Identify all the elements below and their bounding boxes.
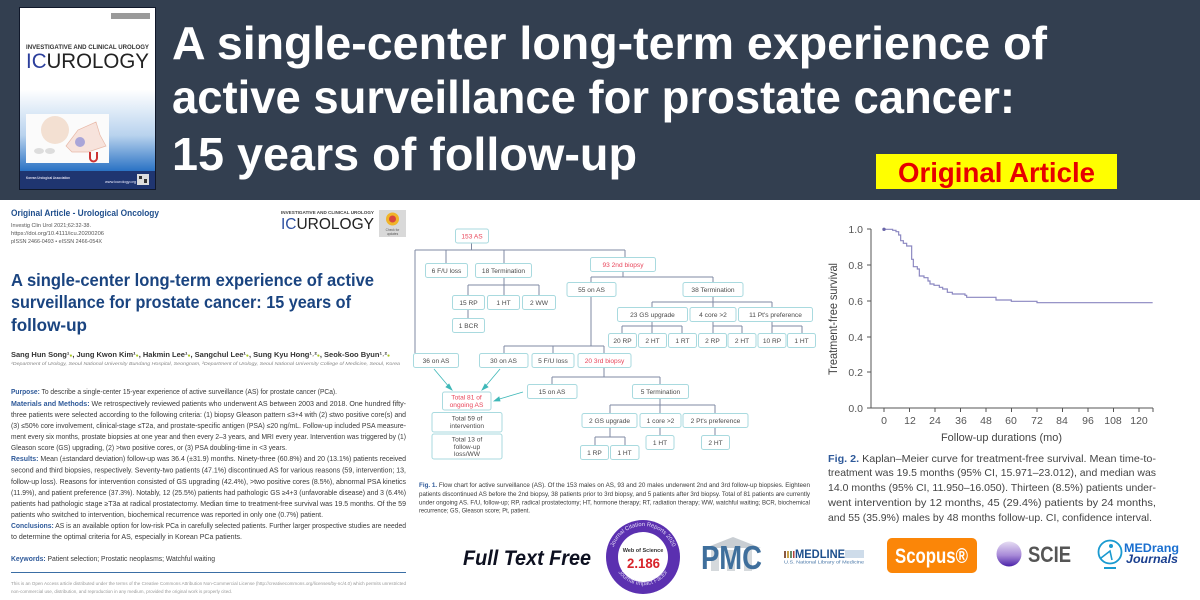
abstract: ment every six months, prostate biopsies at one year and then every 2–3 years, and MRI every year. Intervention was triggered by (1) <box>11 434 406 441</box>
journal cover: Korean Urological Association <box>26 176 70 180</box>
node: 93 2nd biopsy <box>590 258 656 272</box>
node: 2 GS upgrade <box>582 414 637 428</box>
node: 5 Termination: 5 Termination <box>641 389 681 396</box>
node: 15 RP <box>452 296 484 310</box>
license note: This is an Open Access article distributed under the terms of the Creative Commons Attribution Non-Commercial License (http://creativecommons.org/licenses/by-nc/4.0) which permits unrestricted <box>11 581 406 586</box>
article title: follow-up <box>11 315 87 335</box>
node: 2 HT: 2 HT <box>645 338 660 345</box>
node: 1 HT <box>488 296 520 310</box>
node: 1 core >2 <box>640 414 681 428</box>
node: 1 HT <box>788 334 816 348</box>
node: 36 on AS: 36 on AS <box>423 358 450 365</box>
node: 2 GS upgrade: 2 GS upgrade <box>589 418 630 425</box>
main title: 15 years of follow-up <box>172 128 637 180</box>
panel: article first page <box>11 208 407 594</box>
main title: active surveillance for prostate cancer: <box>172 71 1015 123</box>
x axis tick labels: 0 <box>881 415 887 427</box>
node: 10 RP <box>758 334 786 348</box>
node: 5 F/U loss <box>532 354 574 368</box>
node: 5 Termination <box>632 384 688 398</box>
node: 4 core >2: 4 core >2 <box>699 312 727 319</box>
figure 2 caption: 14.0 months (95% CI, 11.950–16.050). Thirteen (8.5%) patients under- <box>828 482 1156 494</box>
node: 153 AS: 153 AS <box>461 234 483 240</box>
node: 2 HT <box>702 436 730 450</box>
node: 15 on AS <box>528 384 577 398</box>
figure 2 caption: and 55 (35.9%) males by 48 months follow-up. CI, confidence interval. <box>828 512 1152 524</box>
logo: MEDrang Journals: MEDrang <box>1124 541 1179 555</box>
journal cover: ICUROLOGY <box>26 50 149 73</box>
node: 1 HT: 1 HT <box>617 450 632 457</box>
node: 1 RP: 1 RP <box>587 450 602 457</box>
y axis tick labels: 0.2 <box>848 367 863 379</box>
abstract: Materials and Methods: We retrospectively reviewed patients who underwent AS between 2003 and 2018. One hundred fifty- <box>11 401 407 408</box>
node: 1 HT: 1 HT <box>496 300 511 307</box>
node: 23 GS upgrade <box>618 308 688 322</box>
figure 1 caption: under ongoing AS. F/U, follow-up; RP, radical prostatectomy; HT, hormone therapy; RT, radiation therapy; WW, watchful waiting; BCR, biochemical <box>419 500 810 506</box>
node: 15 on AS: 15 on AS <box>539 389 566 396</box>
x axis tick labels: 36 <box>955 415 967 427</box>
node: 2 HT <box>638 334 666 348</box>
panel: flow chart <box>414 229 816 460</box>
arrow: 15 on AS to total <box>494 392 523 401</box>
node: 6 F/U loss: 6 F/U loss <box>432 268 462 275</box>
node: 20 3rd biopsy: 20 3rd biopsy <box>585 358 625 365</box>
node: Total 81 of ongoing AS <box>442 392 491 410</box>
abstract: Results: Mean (±standard deviation) follow-up was 36.4 (±31.9) months. Ninety-three (60.8%) and 20 (13.1%) patients received <box>11 456 406 463</box>
node: 1 RT <box>668 334 696 348</box>
abstract: to determine the optimal criteria for AS, especially in Korean PCa patients. <box>11 534 242 541</box>
chart: Kaplan-Meier curve <box>826 224 1153 444</box>
arrow: 30 on AS to total <box>482 369 500 390</box>
citation block: https://doi.org/10.4111/icu.20200206 <box>11 231 104 237</box>
node: 2 Pt's preference <box>683 414 748 428</box>
badge: journal impact factor: Journal Impact Factor <box>618 570 668 586</box>
badge: journal impact factor: Web of Science <box>623 548 663 554</box>
main title: A single-center long-term experience of <box>172 17 1048 69</box>
badge: journal impact factor <box>606 520 680 594</box>
logo: SCIE: SCIE <box>1028 542 1071 567</box>
figure 2 caption: Fig. 2. Kaplan–Meier curve for treatment-free survival. Mean time-to- <box>828 453 1157 465</box>
y axis tick labels: 1.0 <box>848 224 863 236</box>
chart axes <box>867 229 1153 412</box>
node: 30 on AS <box>480 354 528 368</box>
node: 10 RP: 10 RP <box>763 338 782 345</box>
node: 2 HT: 2 HT <box>735 338 749 345</box>
node: 1 HT <box>646 436 674 450</box>
node: Total 81 of ongoing AS: Total 81 of <box>451 394 482 402</box>
node: Total 13 of follow-up loss/WW <box>432 434 502 459</box>
header banner <box>0 0 1200 200</box>
node: 1 HT <box>610 446 639 460</box>
node: 55 on AS: 55 on AS <box>578 287 605 294</box>
node: 30 on AS: 30 on AS <box>490 358 517 365</box>
keywords: Keywords: Patient selection; Prostatic neoplasms; Watchful waiting <box>11 556 215 563</box>
x axis tick labels: 84 <box>1056 415 1068 427</box>
abstract: Purpose: To describe a single-center 15-year experience of active surveillance (AS) for prostate cancer (PCa). <box>11 389 337 396</box>
flow connector lines <box>415 243 802 445</box>
journal cover: INVESTIGATIVE AND CLINICAL UROLOGY <box>26 45 149 51</box>
node: 18 Termination: 18 Termination <box>482 268 525 275</box>
icon: check for updates: updates <box>387 232 399 236</box>
node: 1 core >2: 1 core >2 <box>647 418 675 425</box>
x axis tick labels: 48 <box>980 415 992 427</box>
license note: non-commercial use, distribution, and reproduction in any medium, provided the original work is properly cited. <box>11 589 232 594</box>
node: 20 3rd biopsy <box>578 354 631 368</box>
abstract: patients who switched to intervention, biochemical recurrence was reported in only one (0.7%) patient. <box>11 512 323 519</box>
node: Total 13 of follow-up loss/WW: loss/WW <box>454 451 481 458</box>
logo: MEDrang Journals <box>1098 540 1179 568</box>
logo: Scopus <box>887 538 977 573</box>
y axis tick labels: 0.6 <box>848 296 863 308</box>
abstract: Conclusions: AS is an available option for low-risk PCa in carefully selected patients. Further larger prospective studies are needed <box>11 523 406 530</box>
journal logo: INVESTIGATIVE AND CLINICAL UROLOGY <box>281 210 374 215</box>
article title: surveillance for prostate cancer: 15 years of <box>11 292 351 312</box>
node: 18 Termination <box>476 264 532 278</box>
license note <box>11 581 406 594</box>
node: 23 GS upgrade: 23 GS upgrade <box>630 312 675 319</box>
x axis tick labels: 60 <box>1005 415 1017 427</box>
main title <box>172 17 1048 180</box>
node: Total 81 of ongoing AS: ongoing AS <box>450 402 484 409</box>
y axis tick labels: 0.4 <box>848 332 863 344</box>
x axis tick labels: 96 <box>1082 415 1094 427</box>
survival curve <box>882 228 1153 303</box>
x axis tick labels: 24 <box>929 415 941 427</box>
arrow: 36 on AS to total <box>434 369 452 390</box>
node: 1 HT: 1 HT <box>794 338 809 345</box>
icon: check for updates: Check for <box>386 228 400 232</box>
badge: journal impact factor: Journal Citation Reports 2020 <box>610 522 676 547</box>
figure 2 caption <box>827 453 1157 524</box>
abstract: (11.9%), and patient preference (37.3%). Notably, 12 (25.5%) patients had pathologic GS ≥4+3 (unfavorable disease) and 3 (6.4%) <box>11 490 406 497</box>
article title <box>11 270 374 335</box>
node: 1 RP <box>580 446 608 460</box>
figure 1 caption: recurrence; GS, Gleason score; Pt, patient. <box>419 508 530 514</box>
y axis title: Treatment-free survival <box>826 263 840 375</box>
citation block <box>11 223 104 245</box>
node: 11 Pt's preference: 11 Pt's preference <box>749 312 802 319</box>
logo: SCIE <box>996 542 1071 567</box>
node: 153 AS <box>456 229 488 243</box>
logo: MEDLINE: U.S. National Library of Medicine <box>784 560 864 566</box>
abstract: three patients were selected according to the following criteria: (1) biopsy Gleason pattern ≤3+4 with (2) ≤two positive core(s) and <box>11 412 406 419</box>
node: 2 HT <box>728 334 756 348</box>
x axis tick labels: 12 <box>904 415 916 427</box>
x axis tick labels <box>881 415 1148 427</box>
citation block: pISSN 2466-0493 • eISSN 2466-054X <box>11 239 102 245</box>
logo: MEDLINE <box>784 547 864 566</box>
node: Total 59 of intervention <box>432 412 502 432</box>
abstract: (3) ≤50% core involvement, clinical-stage ≤T2a, and prostate-specific antigen (PSA) ≤20 ng/mL. Follow-up included PSA measure- <box>11 423 407 430</box>
abstract <box>11 389 407 541</box>
node: 55 on AS <box>567 282 616 296</box>
logo: PMC: PMC <box>701 539 762 576</box>
abstract: follow-up loss). Reasons for intervention consisted of GS upgrading (42.4%), >two positive cores (8.5%), abnormal PSA kinetics <box>11 479 406 486</box>
node: Total 59 of intervention: Total 59 of <box>452 416 482 422</box>
authors: Sang Hun Song¹●, Jung Kwon Kim¹●, Hakmin Lee¹●, Sangchul Lee¹●, Sung Kyu Hong¹˒²●, Seok-Soo Byun¹˒²● <box>11 350 390 359</box>
logo: MEDrang Journals: Journals <box>1126 554 1178 566</box>
logo: MEDLINE: MEDLINE <box>795 547 845 561</box>
node: 4 core >2 <box>690 308 736 322</box>
affiliations: ¹Department of Urology, Seoul National University Bundang Hospital, Seongnam, ²Department of Urology, Seoul National University College of Medicine, Seoul, Korea <box>11 361 400 367</box>
original article badge: Original Article <box>898 157 1095 188</box>
node: 15 RP: 15 RP <box>459 300 478 307</box>
node: 93 2nd biopsy: 93 2nd biopsy <box>602 262 644 269</box>
y axis tick labels: 0.0 <box>848 403 863 415</box>
figure 1 caption: Fig. 1. Flow chart for active surveillance (AS). Of the 153 males on AS, 93 and 20 males underwent 2nd and 3rd follow-up biopsies. Eighteen <box>419 482 810 489</box>
node: 1 BCR <box>452 318 484 332</box>
abstract: patients had pathologic stage ≥T3a at radical prostatectomy. Median time to treatment-free survival was 19.5 months. Of the 59 <box>11 501 406 508</box>
node: Total 59 of intervention: intervention <box>450 423 484 430</box>
figure 2 caption: treatment was 19.5 months (95% CI, 15.971–23.012), and median was <box>828 467 1156 479</box>
full text free label: Full Text Free <box>463 547 591 570</box>
node: 11 Pt's preference <box>738 308 812 322</box>
node: 2 RP <box>698 334 726 348</box>
node: 20 RP <box>608 334 636 348</box>
node: 38 Termination <box>683 282 743 296</box>
article title: A single-center long-term experience of active <box>11 270 374 290</box>
node: 20 RP: 20 RP <box>613 338 632 345</box>
badge: journal impact factor: 2.186 <box>627 555 660 571</box>
journal cover <box>19 7 156 190</box>
node: 2 WW <box>522 296 556 310</box>
node: Total 13 of follow-up loss/WW: follow-up <box>454 444 481 451</box>
abstract: Gleason score (GS) upgrading, (2) >two positive cores, or (3) PSA doubling-time in <3 years. <box>11 445 287 452</box>
x axis tick labels: 72 <box>1031 415 1043 427</box>
figure 2 caption: went intervention by 12 months, 45 (29.4%) patients by 24 months, <box>827 497 1156 509</box>
y axis tick labels <box>848 224 863 415</box>
node: 2 HT: 2 HT <box>708 440 723 447</box>
x axis tick labels: 108 <box>1104 415 1122 427</box>
node: 36 on AS <box>414 354 458 368</box>
node: 1 RT: 1 RT <box>675 338 690 345</box>
node: 2 RP: 2 RP <box>705 338 720 345</box>
article section heading: Original Article - Urological Oncology <box>11 208 160 219</box>
journal cover: www.icurology.org <box>105 180 136 184</box>
journal logo: ICUROLOGY <box>281 216 374 233</box>
icon: check for updates <box>379 210 406 237</box>
x axis tick labels: 120 <box>1130 415 1148 427</box>
node: Total 13 of follow-up loss/WW: Total 13 of <box>452 436 482 444</box>
figure 1 caption <box>419 482 811 514</box>
node: 2 WW: 2 WW <box>530 300 549 307</box>
node: 38 Termination: 38 Termination <box>691 287 735 294</box>
node: 6 F/U loss <box>426 264 468 278</box>
node: 1 BCR: 1 BCR <box>459 323 478 330</box>
logo: Scopus: Scopus® <box>895 545 968 568</box>
y axis tick labels: 0.8 <box>848 260 863 272</box>
x axis title: Follow-up durations (mo) <box>941 432 1062 444</box>
node: 1 HT: 1 HT <box>653 440 667 447</box>
node: 5 F/U loss: 5 F/U loss <box>538 358 569 365</box>
citation block: Investig Clin Urol 2021;62:32-38. <box>11 223 91 229</box>
figure 1 caption: patients discontinued AS before the 2nd biopsy, 38 patients prior to 3rd biopsy, and 5 patients after 3rd biopsy. Total of 81 patients are currently <box>419 491 811 498</box>
abstract: second and third biopsies, respectively. Seventy-two patients (47.1%) discontinued AS for various reasons (59, intervention; 13, <box>11 468 406 474</box>
node: 2 Pt's preference: 2 Pt's preference <box>691 418 741 425</box>
